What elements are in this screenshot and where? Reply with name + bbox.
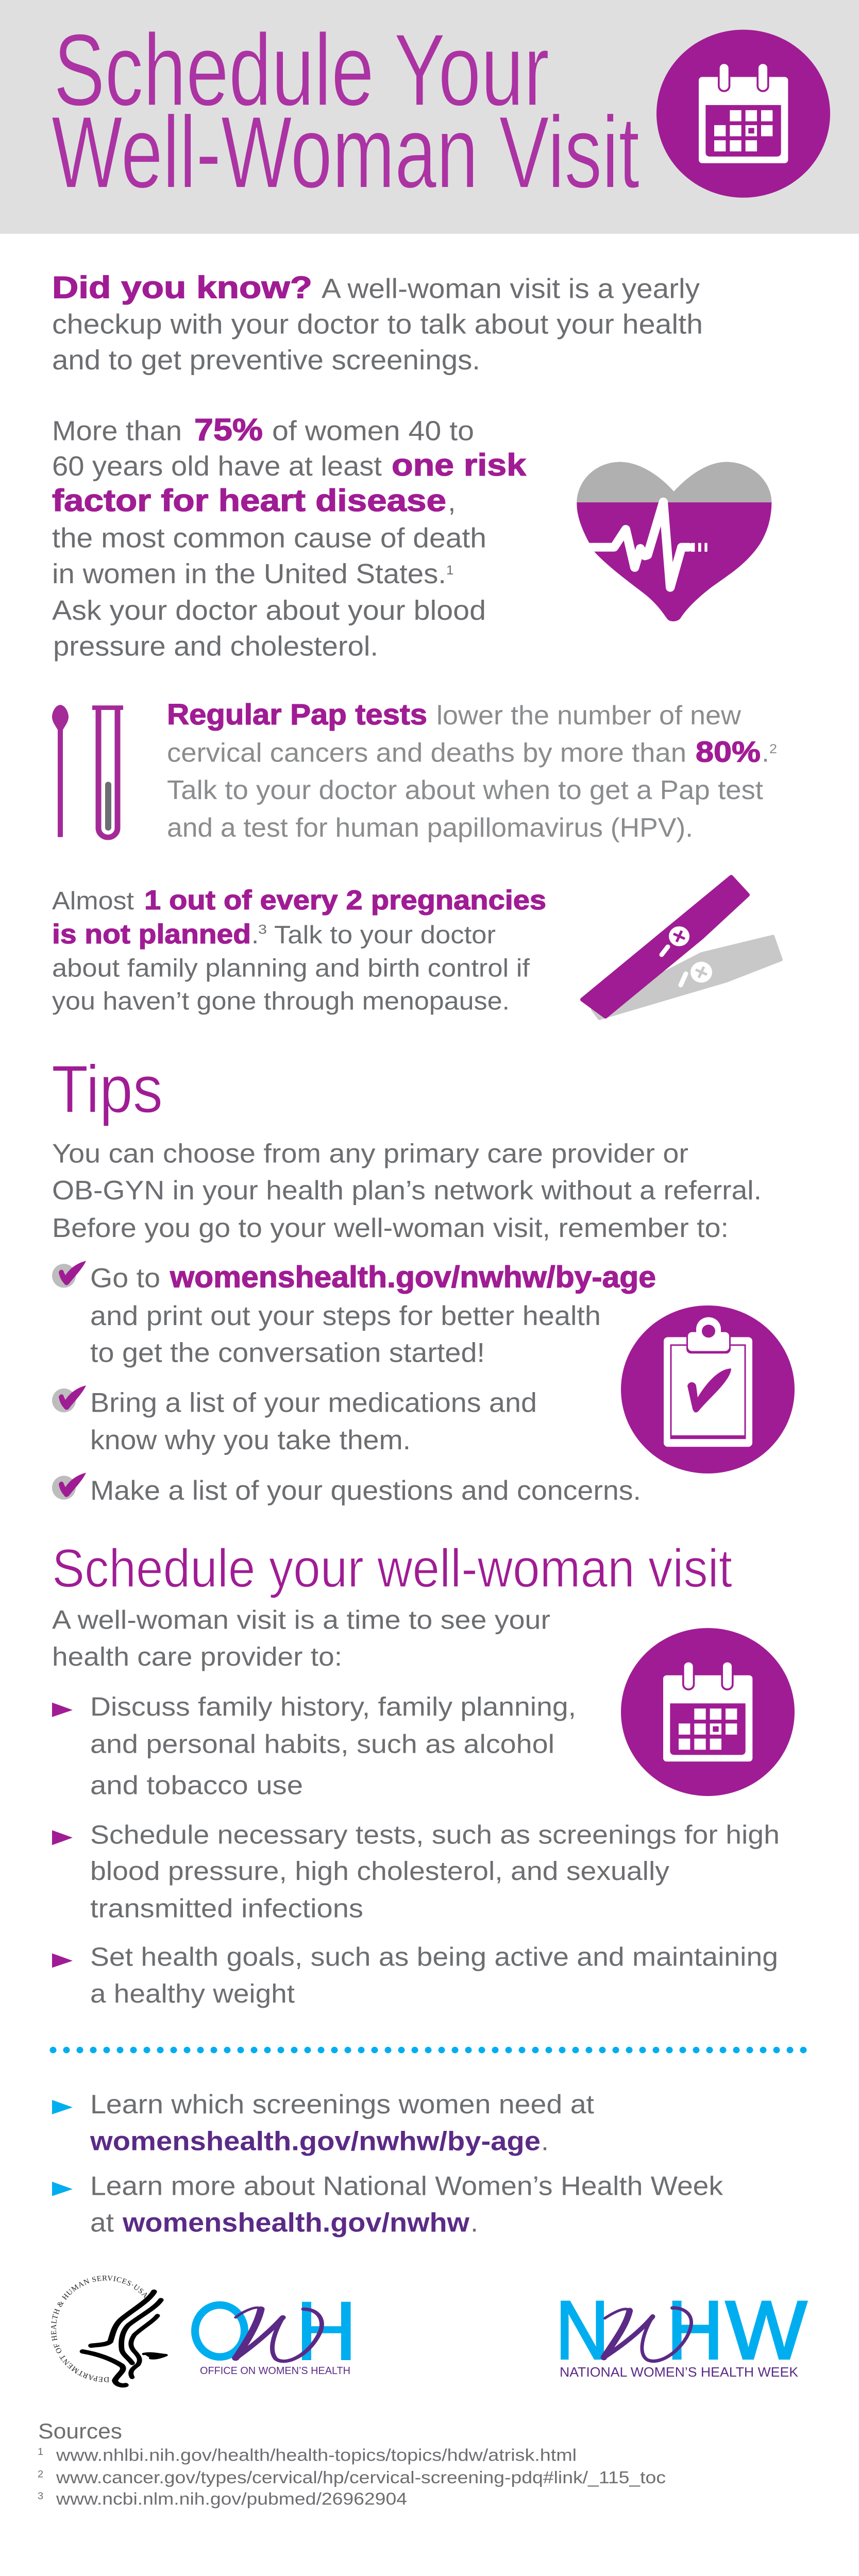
logo: office on women's health: [195, 2302, 350, 2377]
text block: heart disease: 60 years old have at least: [52, 450, 382, 482]
text block: schedule intro: health care provider to:: [52, 1642, 342, 1672]
text block: heart disease: the most common cause of death: [52, 522, 486, 553]
item: screenings: Learn which screenings women need at: [90, 2090, 594, 2120]
text block: heart disease: ,: [448, 486, 456, 517]
text block: pregnancies: .: [251, 921, 259, 949]
item 3: [90, 1942, 778, 2009]
tip 2: know why you take them.: [90, 1425, 411, 1455]
text block: tips intro: OB-GYN in your health plan’s network without a referral.: [52, 1176, 762, 1206]
item 1: and tobacco use: [90, 1771, 303, 1800]
text block: pregnancies: is not planned: [52, 919, 251, 950]
text block: tips intro: Before you go to your well-woman visit, remember to:: [52, 1213, 729, 1243]
item: screenings: .: [541, 2126, 549, 2156]
item 1: [90, 1692, 576, 1800]
heading: tips: Tips: [52, 1052, 163, 1127]
text block: sources: 3: [38, 2490, 43, 2502]
item 3: a healthy weight: [90, 1979, 295, 2009]
icon: calendar: [621, 1628, 795, 1796]
text block: heart disease: 75%: [194, 412, 263, 447]
text block: pregnancies: about family planning and birth control if: [52, 954, 530, 982]
logo: national women's health week: NATIONAL WOMEN’S HEALTH WEEK: [560, 2364, 798, 2380]
text block: did you know: and to get preventive screenings.: [52, 344, 480, 376]
text block: pap tests: Regular Pap tests: [167, 699, 427, 731]
logo: national women's health week: W: [726, 2284, 807, 2377]
text block: pap tests: Talk to your doctor about when to get a Pap test: [167, 775, 763, 805]
text block: tips intro: [52, 1139, 762, 1243]
item: screenings: [90, 2090, 594, 2156]
text block: pap tests: lower the number of new: [436, 701, 742, 731]
item: national women's health week: Learn more about National Women’s Health Week: [90, 2171, 723, 2201]
text block: heart disease: in women in the United States.: [52, 558, 446, 589]
text block: did you know: [52, 270, 703, 376]
item 1: and personal habits, such as alcohol: [90, 1730, 554, 1759]
text block: heart disease: Ask your doctor about your blood: [52, 595, 486, 626]
text block: heart disease: pressure and cholesterol.: [53, 630, 378, 662]
panel: header: [0, 0, 859, 234]
tip 1: and print out your steps for better health: [90, 1301, 601, 1331]
item: screenings: womenshealth.gov/nwhw/by-age: [90, 2126, 541, 2156]
text block: heart disease: 1: [446, 563, 453, 578]
text block: heart disease: factor for heart disease: [52, 483, 446, 518]
arrow: [52, 1953, 73, 1968]
list: learn more: [52, 2090, 723, 2238]
tip 2: [90, 1387, 537, 1455]
item: national women's health week: womenshealth.gov/nwhw: [122, 2208, 470, 2238]
icon: check mark: [52, 1261, 86, 1288]
text block: pregnancies: 3: [258, 923, 267, 937]
text block: pap tests: 2: [769, 742, 777, 756]
text block: schedule intro: A well-woman visit is a time to see your: [52, 1605, 550, 1635]
text block: tips intro: You can choose from any primary care provider or: [52, 1139, 688, 1168]
icon: check mark: [52, 1385, 86, 1412]
item 2: blood pressure, high cholesterol, and sexually: [90, 1857, 669, 1886]
icon: clipboard: [621, 1306, 795, 1473]
tip 3: Make a list of your questions and concerns.: [90, 1476, 641, 1506]
title: Well-Woman Visit: [52, 95, 639, 209]
text block: heart disease: [52, 412, 526, 662]
text block: did you know: Did you know?: [52, 270, 312, 304]
tip 1: [90, 1260, 656, 1368]
text block: heart disease: More than: [52, 415, 182, 446]
heading: schedule your well-woman visit: Schedule your well-woman visit: [52, 1538, 732, 1599]
text block: pap tests: [167, 699, 777, 843]
item 2: [90, 1820, 780, 1923]
item 1: Discuss family history, family planning,: [90, 1692, 576, 1722]
icon: heart with pulse: [577, 462, 771, 621]
text block: pregnancies: 1 out of every 2 pregnancies: [144, 885, 546, 916]
title: Schedule Your: [54, 12, 549, 127]
logo: national women's health week: H: [667, 2284, 723, 2377]
text block: did you know: A well-woman visit is a yearly: [322, 273, 700, 304]
tip 1: to get the conversation started!: [90, 1337, 485, 1368]
text block: sources: www.ncbi.nlm.nih.gov/pubmed/26962904: [56, 2490, 407, 2509]
title: [52, 12, 639, 209]
text block: sources: www.nhlbi.nih.gov/health/health-topics/topics/hdw/atrisk.html: [56, 2446, 577, 2465]
text block: sources: [38, 2419, 666, 2509]
text block: pap tests: .: [762, 738, 769, 768]
item: national women's health week: .: [470, 2208, 478, 2238]
logo: hhs seal: DEPARTMENT OF HEALTH & HUMAN SERVICES·USA: [50, 2275, 147, 2382]
list: tips checklist: [52, 1260, 656, 1506]
list: visit topics: [52, 1692, 780, 2009]
text block: sources: Sources: [38, 2419, 122, 2443]
text block: schedule intro: [52, 1605, 550, 1672]
text block: pregnancies: Almost: [52, 887, 134, 915]
text block: pap tests: 80%: [696, 736, 761, 768]
arrow: [52, 2100, 73, 2114]
logo: national women's health week: [555, 2284, 807, 2380]
icon: calendar: [656, 30, 830, 198]
text block: pregnancies: you haven’t gone through menopause.: [52, 987, 510, 1015]
arrow: [52, 1830, 73, 1845]
icon: pregnancy tests: [582, 877, 781, 1019]
tip 2: Bring a list of your medications and: [90, 1387, 537, 1418]
logo: national women's health week: N: [555, 2284, 609, 2377]
text block: pap tests: cervical cancers and deaths by more than: [167, 738, 686, 768]
icon: swab and test tube: [52, 705, 123, 837]
arrow: [52, 2182, 73, 2196]
logo: office on women's health: OFFICE ON WOMEN’S HEALTH: [200, 2365, 350, 2377]
tip 1: womenshealth.gov/nwhw/by-age: [170, 1260, 656, 1294]
text block: did you know: checkup with your doctor to talk about your health: [52, 308, 703, 340]
item: national women's health week: [90, 2171, 723, 2238]
icon: check mark: [52, 1473, 86, 1500]
item 3: Set health goals, such as being active and maintaining: [90, 1942, 778, 1972]
text block: heart disease: of women 40 to: [272, 415, 474, 446]
item 2: transmitted infections: [90, 1894, 363, 1923]
text block: pregnancies: Talk to your doctor: [274, 921, 496, 949]
arrow: [52, 1703, 73, 1717]
text block: heart disease: one risk: [392, 448, 526, 482]
item: national women's health week: at: [90, 2208, 114, 2238]
text block: sources: 2: [38, 2469, 43, 2480]
text block: sources: www.cancer.gov/types/cervical/hp/cervical-screening-pdq#link/_115_toc: [56, 2468, 666, 2487]
text block: pap tests: and a test for human papillomavirus (HPV).: [167, 813, 693, 843]
text block: sources: 1: [38, 2446, 43, 2458]
tip 1: Go to: [90, 1263, 160, 1293]
item 2: Schedule necessary tests, such as screenings for high: [90, 1820, 780, 1850]
text block: pregnancies: [52, 885, 546, 1015]
